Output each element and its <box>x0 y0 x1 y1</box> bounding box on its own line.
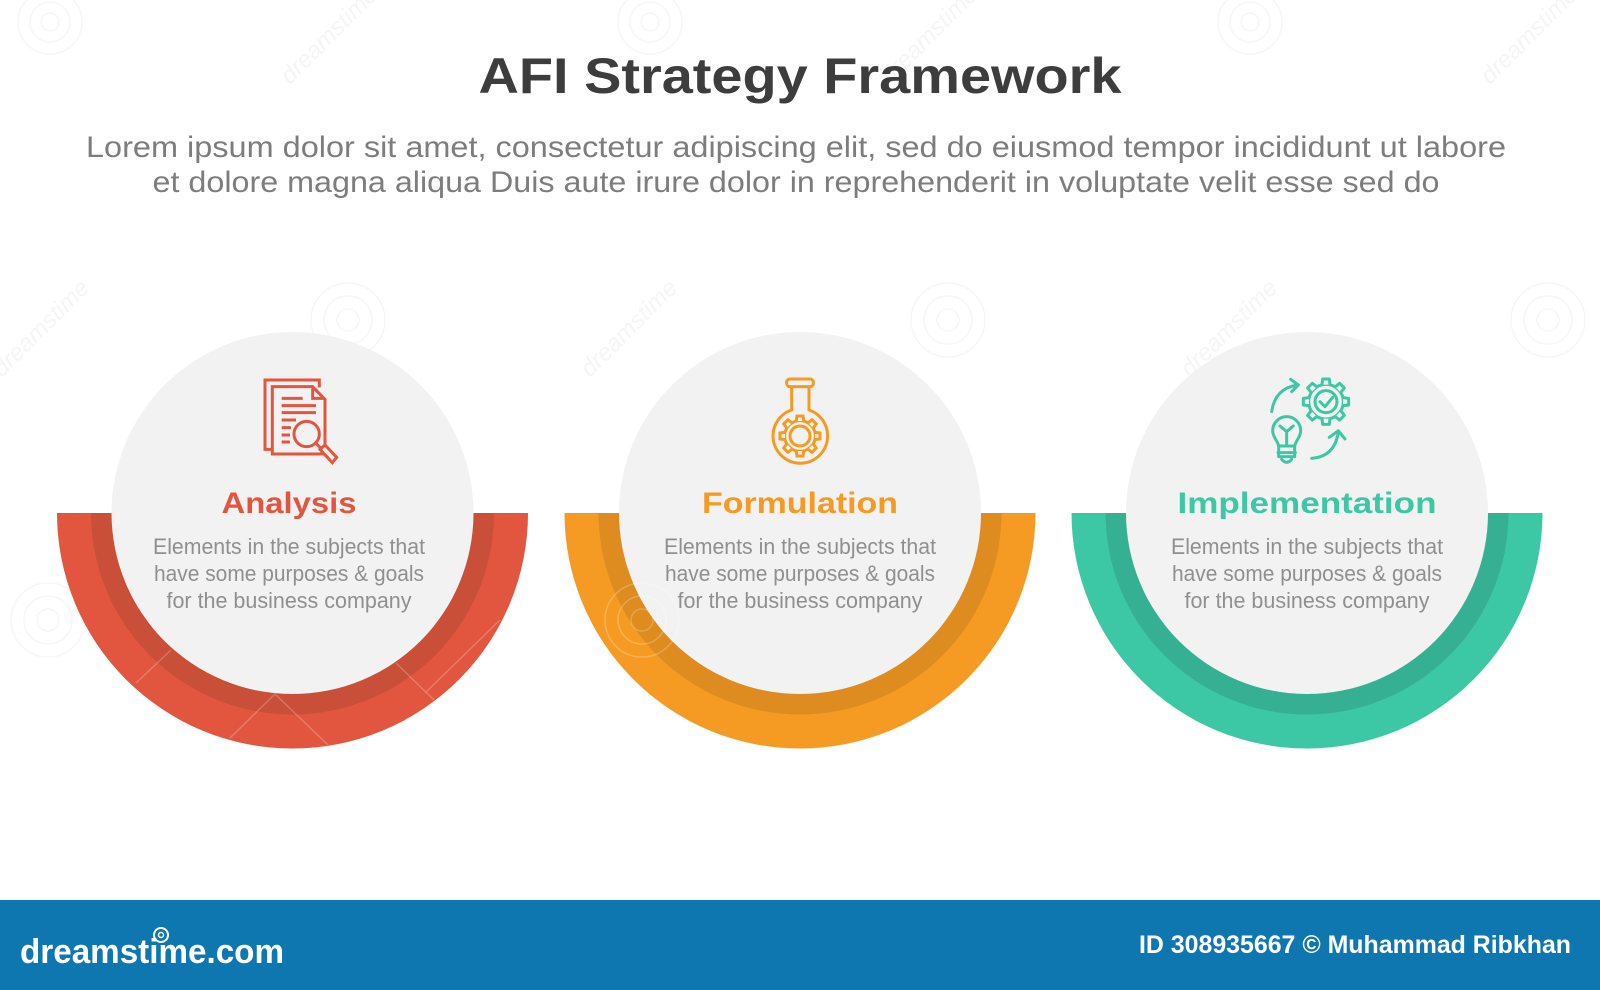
panel: analysis <box>57 332 528 748</box>
footer logo: dreamstime.com <box>20 933 284 971</box>
description: analysis <box>153 534 425 613</box>
icon: bulb, gear and arrows <box>1272 379 1349 462</box>
subtitle text: et dolore magna aliqua Duis aute irure dolor in reprehenderit in voluptate velit esse sed do <box>152 166 1440 199</box>
description: formulation: have some purposes & goals <box>665 561 935 586</box>
description: formulation <box>664 534 936 613</box>
description: analysis: for the business company <box>166 588 412 613</box>
icon: flask with gear <box>773 379 828 463</box>
inner half ring: implementation <box>1106 513 1508 714</box>
description: formulation: Elements in the subjects that <box>664 534 936 559</box>
description: analysis: Elements in the subjects that <box>153 534 425 559</box>
description: implementation: have some purposes & goals <box>1172 561 1442 586</box>
footer banner <box>0 900 1600 990</box>
subtitle text <box>86 131 1506 199</box>
circle: implementation <box>1126 332 1488 694</box>
subtitle text: Lorem ipsum dolor sit amet, consectetur adipiscing elit, sed do eiusmod tempor incididunt ut labore <box>86 131 1506 164</box>
description: implementation: Elements in the subjects that <box>1171 534 1443 559</box>
outer half ring: analysis <box>57 513 528 748</box>
circle: formulation <box>619 332 981 694</box>
heading: implementation: Implementation <box>1178 487 1436 520</box>
text: dreamstime <box>575 274 683 382</box>
inner half ring: analysis <box>91 513 494 714</box>
description: formulation: for the business company <box>678 588 922 613</box>
heading: analysis: Analysis <box>222 487 356 520</box>
panel: implementation <box>1072 332 1542 748</box>
heading: formulation: Formulation <box>702 487 898 520</box>
description: implementation <box>1171 534 1443 613</box>
circle: analysis <box>112 332 474 694</box>
footer credit: ID 308935667 © Muhammad Ribkhan <box>1139 931 1571 959</box>
description: analysis: have some purposes & goals <box>154 561 424 586</box>
title: AFI Strategy Framework <box>478 48 1122 104</box>
outer half ring: implementation <box>1072 513 1542 748</box>
inner half ring: formulation <box>598 513 1002 714</box>
description: implementation: for the business company <box>1184 588 1430 613</box>
icon: document with magnifier <box>265 380 337 463</box>
panel: formulation <box>564 332 1036 748</box>
outer half ring: formulation <box>564 513 1036 748</box>
text: dreamstime <box>1175 274 1283 382</box>
